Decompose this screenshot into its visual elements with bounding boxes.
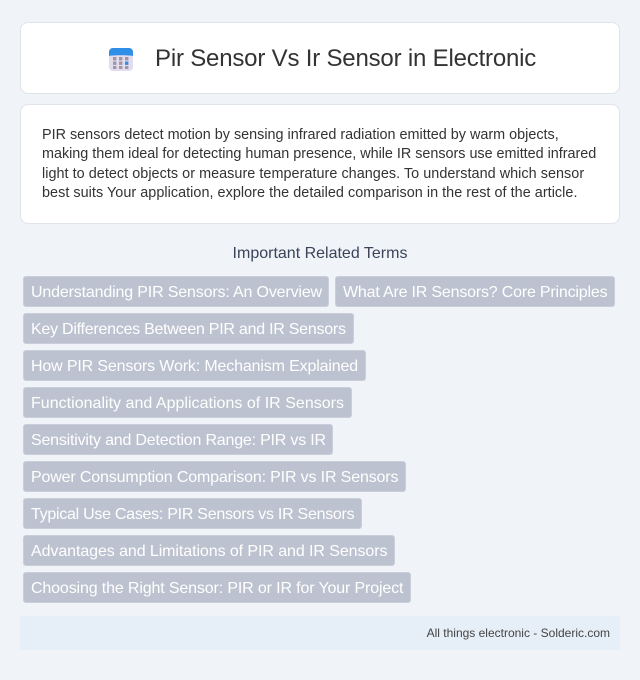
tag 7	[23, 461, 406, 492]
tag 5	[23, 387, 352, 418]
tag 10: Choosing the Right Sensor: PIR or IR for Your Project	[31, 580, 403, 597]
tag 1	[23, 276, 329, 307]
tag 10	[23, 572, 411, 603]
footer bar	[20, 616, 620, 650]
tag 5: Functionality and Applications of IR Sensors	[31, 395, 344, 412]
tag 9: Advantages and Limitations of PIR and IR Sensors	[31, 543, 387, 560]
tag 4	[23, 350, 366, 381]
intro paragraph	[42, 127, 596, 201]
intro paragraph: making them ideal for detecting human presence, while IR sensors use emitted infrared	[42, 146, 596, 162]
header card	[20, 22, 620, 94]
tag 6: Sensitivity and Detection Range: PIR vs IR	[31, 432, 326, 449]
icon: calendar	[109, 48, 133, 71]
tag 2	[335, 276, 615, 307]
intro paragraph: PIR sensors detect motion by sensing infrared radiation emitted by warm objects,	[42, 127, 559, 143]
tag 3: Key Differences Between PIR and IR Sensors	[31, 321, 346, 338]
tag 9	[23, 535, 395, 566]
tag 4: How PIR Sensors Work: Mechanism Explained	[31, 358, 358, 375]
tag 7: Power Consumption Comparison: PIR vs IR Sensors	[31, 469, 398, 486]
intro text panel	[20, 104, 620, 224]
tag 1: Understanding PIR Sensors: An Overview	[31, 284, 322, 301]
title: Pir Sensor Vs Ir Sensor in Electronic	[155, 45, 536, 72]
tag 6	[23, 424, 333, 455]
tag list	[23, 276, 615, 603]
tag 8	[23, 498, 362, 529]
section heading: Important Related Terms	[233, 245, 407, 262]
tag 8: Typical Use Cases: PIR Sensors vs IR Sensors	[31, 506, 354, 523]
tag 2: What Are IR Sensors? Core Principles	[343, 284, 607, 301]
tag 3	[23, 313, 354, 344]
intro paragraph: light to detect objects or measure temperature changes. To understand which sensor	[42, 166, 584, 182]
intro paragraph: best suits Your application, explore the detailed comparison in the rest of the article.	[42, 185, 578, 201]
footer credit: All things electronic - Solderic.com	[427, 626, 610, 640]
